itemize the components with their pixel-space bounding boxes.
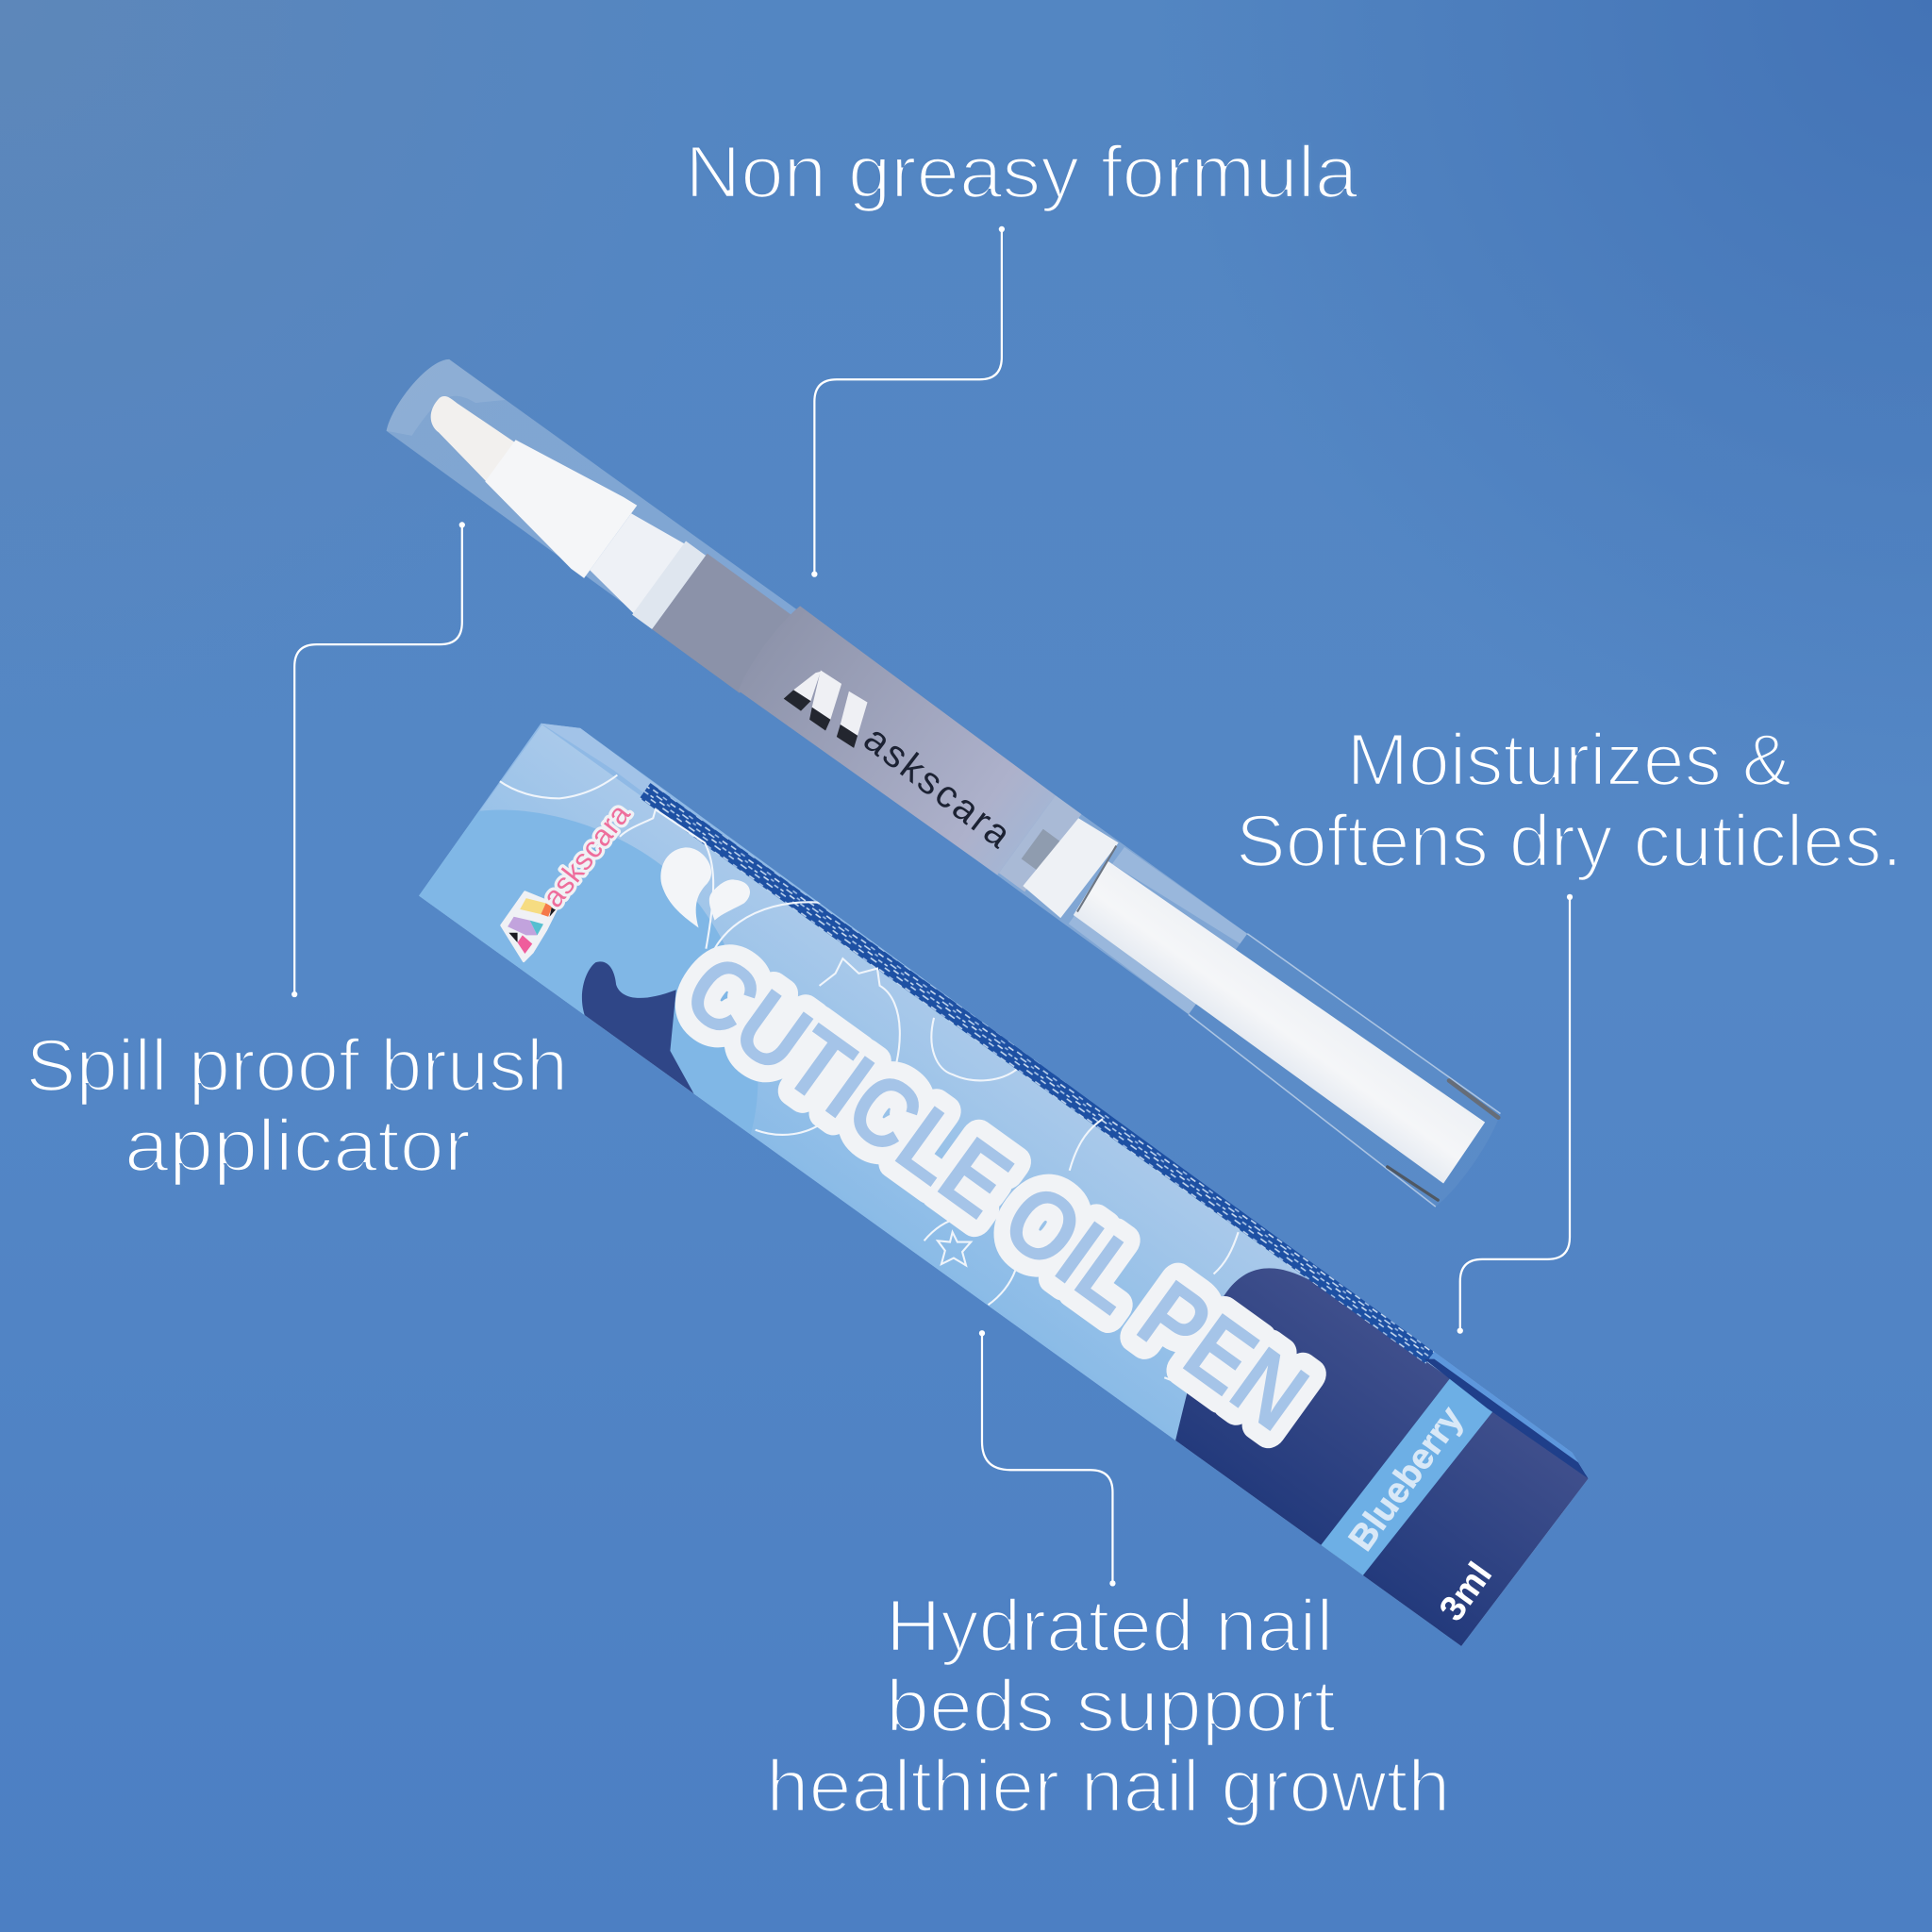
barrel bbox=[1070, 852, 1487, 1185]
ferrule thread bbox=[1022, 829, 1061, 872]
box top flap bbox=[541, 724, 667, 792]
brush tip bbox=[415, 391, 518, 485]
dark end panel bbox=[1175, 1268, 1589, 1646]
white collar bbox=[1021, 812, 1119, 920]
label: hydrated nail beds: Hydrated nail bbox=[886, 1584, 1333, 1667]
product title badge: PEN bbox=[1120, 1258, 1327, 1452]
decorative line arcs bbox=[498, 775, 1239, 1388]
product: cuticle oil pen bbox=[375, 342, 1507, 1209]
flavour stripe bbox=[1320, 1374, 1494, 1582]
connector: hydrated nail beds bbox=[979, 1330, 1116, 1587]
label: moisturizes and softens bbox=[1236, 718, 1903, 882]
label: moisturizes and softens: Softens dry cuticles. bbox=[1236, 799, 1903, 882]
translucent tube over barrel bbox=[1067, 845, 1247, 1014]
brand name on box: askscara bbox=[536, 797, 637, 913]
brand logo sticker bbox=[502, 892, 558, 961]
label: spill proof brush applicator bbox=[25, 1024, 568, 1187]
product title badge: OIL bbox=[984, 1161, 1164, 1335]
label: hydrated nail beds bbox=[766, 1584, 1450, 1827]
box silhouette and top face bbox=[419, 724, 1589, 1646]
label: spill proof brush applicator: Spill proof brush bbox=[25, 1024, 568, 1107]
light top strip at far end bbox=[1429, 1352, 1585, 1474]
pen sleeve bbox=[734, 603, 1057, 878]
label: non greasy formula: Non greasy formula bbox=[685, 130, 1358, 213]
label: spill proof brush applicator: applicator bbox=[125, 1104, 471, 1187]
neck bbox=[584, 508, 705, 628]
pen brand text: askscara bbox=[857, 717, 1020, 857]
sleeve transition bbox=[999, 795, 1081, 891]
product: retail box bbox=[412, 707, 1607, 1657]
connector: moisturizes bbox=[1457, 894, 1573, 1334]
connector: non greasy formula bbox=[811, 226, 1005, 577]
dark edge near box end bbox=[1424, 1359, 1589, 1478]
pen logo mark bbox=[784, 671, 868, 748]
Blueberry label: Blueberry bbox=[1341, 1400, 1471, 1558]
grey inner body bbox=[652, 554, 795, 693]
label: hydrated nail beds: beds support bbox=[886, 1664, 1336, 1747]
connector: spill proof brush bbox=[291, 522, 465, 997]
light blue wave bbox=[419, 809, 758, 1134]
dark splash bbox=[581, 961, 694, 1094]
box front face bbox=[412, 707, 1607, 1657]
label: hydrated nail beds: healthier nail growth bbox=[766, 1744, 1450, 1827]
product title badge: CUTICLE bbox=[665, 932, 1031, 1239]
white drops bbox=[660, 847, 750, 928]
product title badge bbox=[665, 932, 1327, 1452]
clear outer tube bbox=[375, 342, 1507, 1209]
3ml label: 3ml bbox=[1432, 1556, 1500, 1628]
metal end strips bbox=[1388, 1080, 1498, 1200]
brush cone and flange bbox=[474, 425, 637, 578]
dotted side band bbox=[640, 783, 1437, 1364]
label: moisturizes and softens: Moisturizes & bbox=[1347, 718, 1791, 801]
